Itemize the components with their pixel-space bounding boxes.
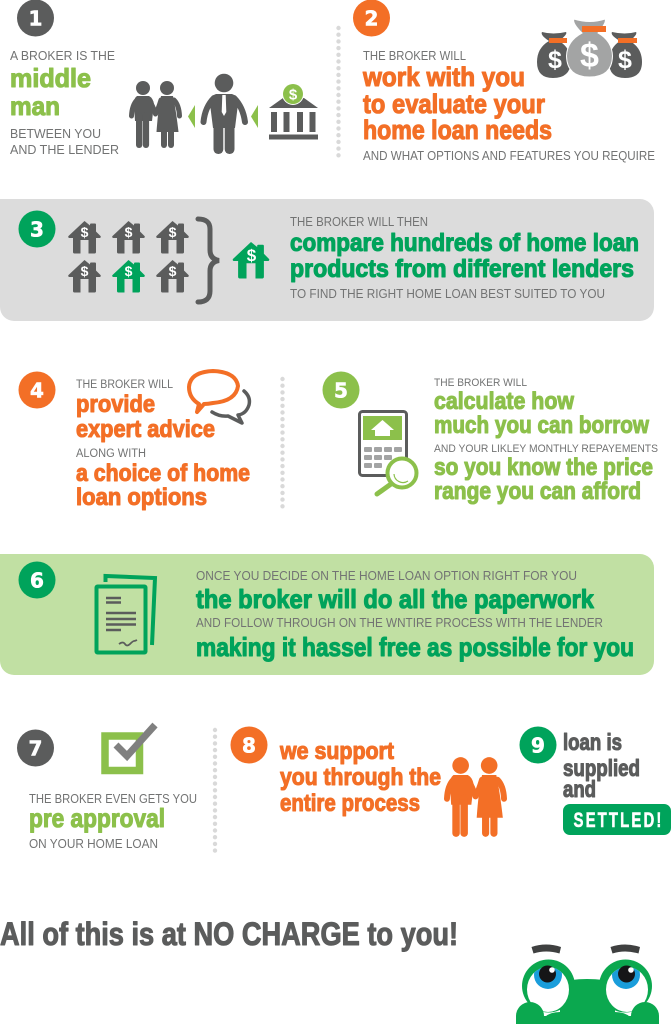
icon: money bags: $ [618,46,632,74]
number badge 3 [18,210,56,248]
text: provide expert advice: loan options [76,484,207,511]
text: compare hundreds of home loan products: TO FIND THE RIGHT HOME LOAN BEST SUITED TO YOU [290,287,605,301]
grey background panel [0,199,654,321]
panel: step 6 paperwork [0,554,654,675]
icon: curly brace [198,219,219,302]
text: calculate how much you can borrow: range you can afford [434,478,641,505]
panel: step 5 calculate borrowing [322,372,658,505]
number badge 5: 5 [334,378,348,402]
icon: money bags: $ [548,46,562,74]
icon: grid of houses: $ [81,263,89,279]
text: broker gets pre approval [29,792,197,851]
text: broker gets pre approval: pre approval [29,803,165,833]
text: provide expert advice: expert advice [76,416,215,443]
badge: settled [563,804,671,835]
text: we support you through the entire process [279,738,441,817]
icon: documents [96,576,155,652]
icon: grid of houses [68,221,189,292]
text: calculate how much you can borrow: AND YOUR LIKLEY MONTHLY REPAYEMENTS [434,443,658,455]
text: broker gets pre approval: ON YOUR HOME LOAN [29,837,158,851]
text: provide expert advice: THE BROKER WILL [76,379,174,391]
text: loan is supplied and: supplied [563,755,640,781]
light green background panel [0,554,654,675]
icon: checkbox [105,725,155,770]
number badge 7 [17,730,54,766]
number badge 8: 8 [242,734,256,758]
text: a broker is the middle man: AND THE LENDER [10,143,119,157]
number badge 8 [230,726,268,764]
number badge 3: 3 [30,218,44,242]
number badge 2 [353,0,390,36]
text: broker gets pre approval: THE BROKER EVEN GETS YOU [29,792,197,806]
text: compare hundreds of home loan products: compare hundreds of home loan [290,229,639,257]
panel: step 4 expert advice [18,371,250,511]
number badge 2: 2 [365,6,378,30]
icon: money bags [537,19,642,78]
text: work with you to evaluate your home loan needs: home loan needs [363,115,552,145]
number badge 9 [520,726,556,764]
text: a broker is the middle man: middle [10,63,91,93]
icon: grid of houses: $ [81,224,89,240]
text: provide expert advice [76,379,250,511]
icon: chosen green house [233,242,269,278]
icon: grid of houses: $ [125,263,133,279]
icon: grid of houses: $ [169,224,177,240]
panel: step 2 evaluate needs [353,0,655,163]
text: work with you to evaluate your home loan needs: to evaluate your [363,89,545,119]
text: we support you through the entire process: entire process [280,790,420,817]
arrow: broker to couple [188,105,195,128]
text: provide expert advice: provide [76,391,155,418]
text: calculate how much you can borrow: calculate how [434,388,575,415]
mascot: green frog peeking [516,944,659,1024]
panel: step 8 support [230,726,504,837]
closing headline: All of this is at NO CHARGE to you! [0,916,458,952]
text: loan is supplied and [563,729,640,802]
text: work with you to evaluate your home loan needs: work with you [362,62,525,92]
divider: dots between steps 7 and 8 [213,730,217,851]
text: provide expert advice: a choice of home [76,460,250,487]
text: loan is supplied and: loan is [563,729,622,755]
arrow: lender to broker [251,105,258,128]
icon: couple [132,81,180,148]
text: work with you to evaluate your home loan needs [362,49,655,163]
icon: money bags: $ [580,37,599,75]
text: we support you through the entire process: you through the [280,764,441,791]
text: a broker is the middle man: man [10,91,60,121]
text: we support you through the entire process: we support [279,738,394,765]
icon: speech bubbles [189,371,249,423]
number badge 1 [17,0,54,36]
text: calculate how much you can borrow: THE BROKER WILL [434,377,527,389]
icon: grid of houses: $ [125,224,133,240]
number badge 9: 9 [531,734,545,758]
number badge 4: 4 [30,378,44,402]
icon: bank with dollar: $ [289,86,298,104]
panel: step 9 settled [520,726,671,835]
number badge 1: 1 [29,6,42,30]
text: compare hundreds of home loan products: THE BROKER WILL THEN [290,215,428,229]
panel: step 7 pre approval [17,725,197,851]
text: compare hundreds of home loan products [290,215,639,301]
divider: dots between steps 1 and 2 [336,28,341,156]
icon: bank with dollar [269,83,318,140]
text: the broker will do all the paperwork [196,569,634,662]
text: work with you to evaluate your home loan needs: AND WHAT OPTIONS AND FEATURES YOU REQUIRE [363,149,655,163]
number badge 5 [322,372,360,408]
number badge 6 [18,562,56,598]
text: a broker is the middle man [10,49,119,157]
icon: chosen green house: $ [247,246,257,265]
icon: calculator with magnifier [360,412,416,494]
text: a broker is the middle man: A BROKER IS THE [10,49,115,63]
text: provide expert advice: ALONG WITH [76,448,146,460]
text: a broker is the middle man: BETWEEN YOU [10,127,101,141]
divider: dots between steps 4 and 5 [280,379,285,508]
icon: orange couple [447,757,504,837]
text: the broker will do all the paperwork: the broker will do all the paperwork [196,584,594,614]
number badge 7: 7 [29,736,42,760]
text: compare hundreds of home loan products: products from different lenders [290,255,634,283]
text: work with you to evaluate your home loan needs: THE BROKER WILL [363,49,466,63]
text: calculate how much you can borrow [434,377,658,505]
icon: broker in tie [204,74,245,154]
text: the broker will do all the paperwork: ONCE YOU DECIDE ON THE HOME LOAN OPTION RIGHT FOR YOU [196,569,577,583]
panel: step 1 middle man [10,0,318,157]
text: loan is supplied and: and [563,776,596,802]
panel: step 3 compare loans [0,199,654,321]
icon: grid of houses: $ [169,263,177,279]
number badge 4 [18,372,56,408]
text: the broker will do all the paperwork: AND FOLLOW THROUGH ON THE WNTIRE PROCESS WITH THE LENDER [196,616,603,630]
number badge 6: 6 [30,568,44,592]
